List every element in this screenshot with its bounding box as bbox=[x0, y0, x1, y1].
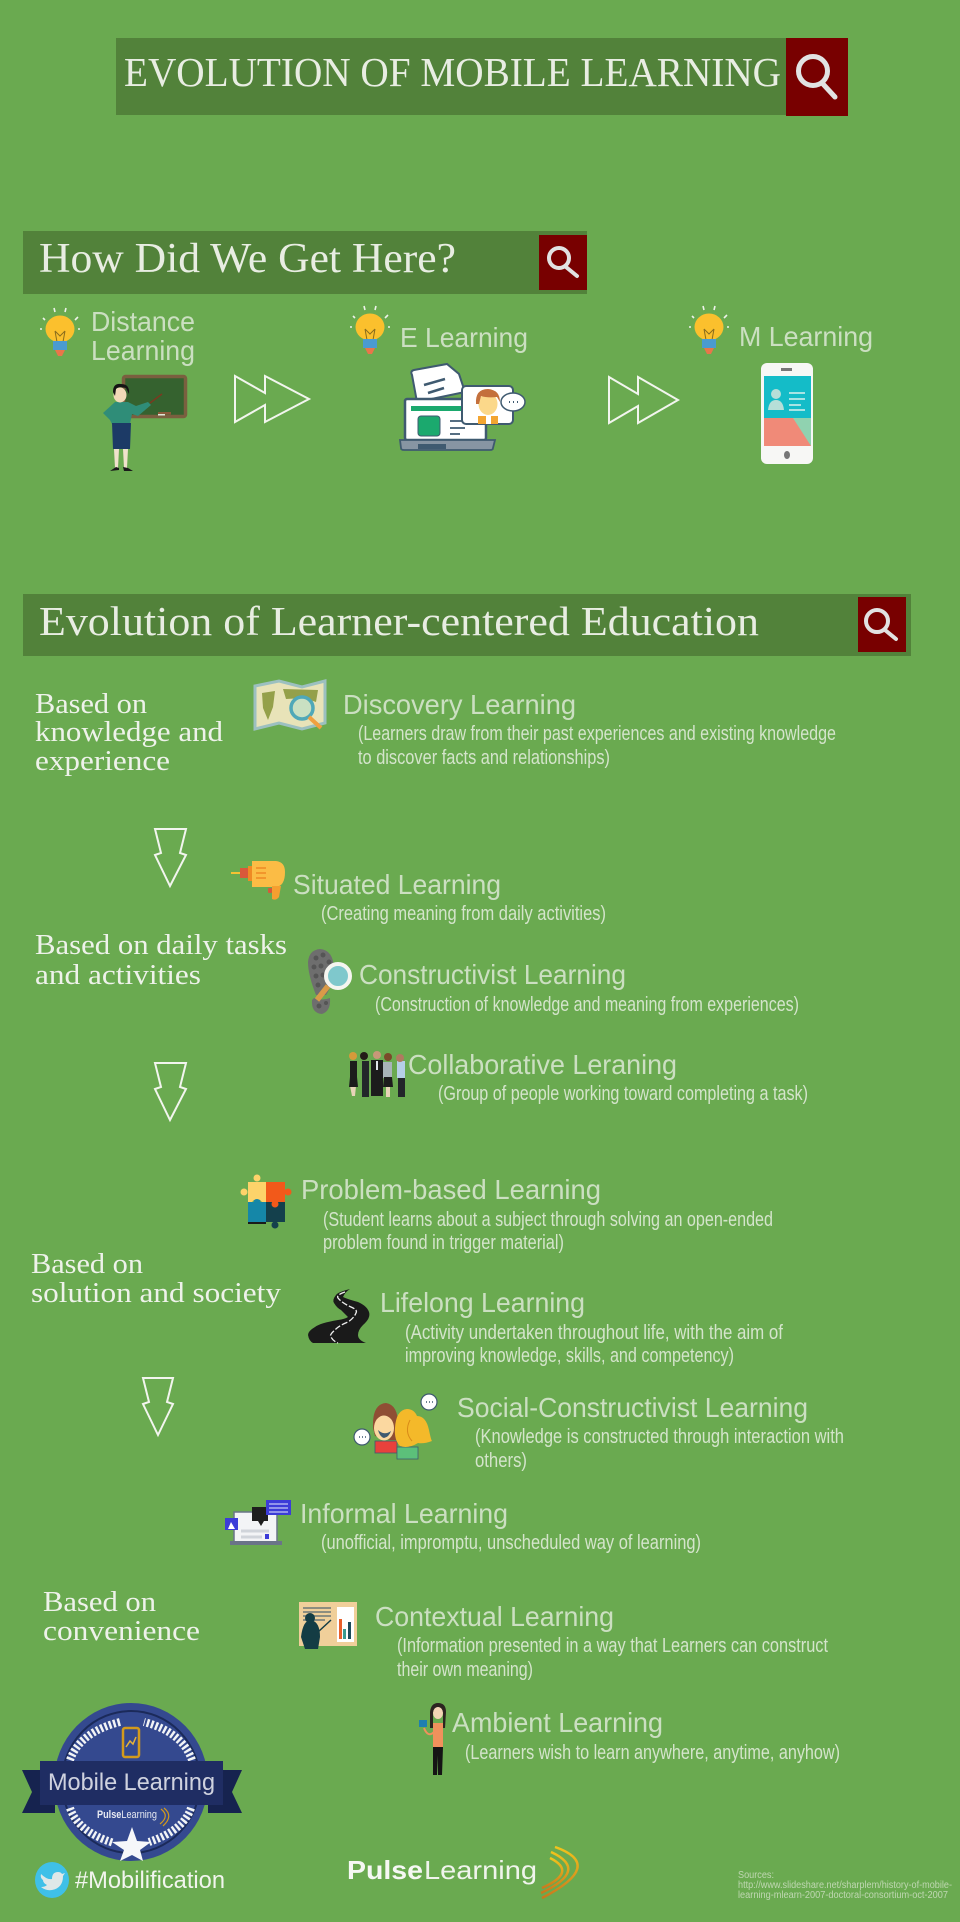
badge: mobile learning bbox=[22, 1703, 242, 1861]
step: e learning bbox=[350, 306, 528, 450]
category: based on convenience: convenience bbox=[43, 1616, 200, 1647]
arrow: down 1 bbox=[155, 829, 186, 886]
heading: Lifelong Learning bbox=[380, 1287, 585, 1318]
description bbox=[405, 1322, 783, 1367]
badge logo bbox=[97, 1808, 169, 1826]
icon: light bulb bbox=[40, 308, 80, 356]
panel: how did we get here heading bbox=[23, 231, 587, 294]
badge logo: PulseLearning bbox=[97, 1809, 157, 1821]
heading: Discovery Learning bbox=[343, 689, 576, 720]
sources: learning-mlearn-2007-doctoral-consortium-oct-2007 bbox=[738, 1890, 948, 1901]
item: constructivist learning bbox=[308, 949, 799, 1016]
item: problem-based learning bbox=[240, 1174, 773, 1254]
description: improving knowledge, skills, and competency) bbox=[405, 1345, 734, 1367]
description bbox=[397, 1635, 828, 1681]
icon: swirl bbox=[541, 1847, 578, 1898]
title: EVOLUTION OF MOBILE LEARNING bbox=[124, 49, 781, 95]
description: (Construction of knowledge and meaning from experiences) bbox=[375, 994, 799, 1016]
category: based on solution and society: solution and society bbox=[31, 1278, 281, 1309]
heading: Evolution of Learner-centered Education bbox=[39, 598, 759, 644]
label: E Learning bbox=[400, 322, 528, 353]
description: (Student learns about a subject through solving an open-ended bbox=[323, 1209, 773, 1231]
arrow: double chevron 1 bbox=[235, 376, 309, 422]
icon: star bbox=[112, 1827, 151, 1861]
category: based on knowledge and experience: Based on bbox=[35, 689, 147, 720]
heading: Informal Learning bbox=[300, 1498, 508, 1529]
sources: Sources: bbox=[738, 1870, 774, 1881]
icon: light bulb bbox=[350, 306, 390, 354]
category: based on solution and society bbox=[31, 1249, 281, 1309]
icon: presenter with chart bbox=[299, 1602, 357, 1649]
icon: puzzle bbox=[240, 1174, 292, 1228]
category: based on daily tasks and activities bbox=[35, 930, 287, 991]
category: based on daily tasks and activities: Based on daily tasks bbox=[35, 930, 287, 961]
description bbox=[323, 1209, 773, 1254]
heading: Situated Learning bbox=[293, 869, 501, 900]
description: (Group of people working toward completing a task) bbox=[438, 1083, 808, 1105]
icon: light bulb bbox=[689, 306, 729, 354]
logo: pulselearning: Learning bbox=[424, 1855, 537, 1885]
logo: pulselearning bbox=[347, 1847, 578, 1898]
heading: Collaborative Leraning bbox=[408, 1049, 677, 1080]
laurel wreath bbox=[70, 1722, 192, 1843]
description: (Creating meaning from daily activities) bbox=[321, 903, 606, 925]
category: based on convenience bbox=[43, 1587, 200, 1647]
icon: two women talking bbox=[354, 1394, 437, 1459]
icon: magnifier bbox=[539, 235, 587, 290]
item: contextual learning bbox=[299, 1601, 828, 1681]
description: (Activity undertaken throughout life, with the aim of bbox=[405, 1322, 783, 1344]
label: M Learning bbox=[739, 321, 873, 352]
logo: pulselearning: Pulse bbox=[347, 1855, 423, 1885]
heading: Constructivist Learning bbox=[359, 959, 626, 990]
item: discovery learning bbox=[255, 681, 836, 769]
item: situated learning bbox=[231, 861, 606, 925]
heading: Ambient Learning bbox=[452, 1707, 663, 1738]
icon: group of people bbox=[349, 1051, 405, 1097]
description: (Learners wish to learn anywhere, anytime, anyhow) bbox=[465, 1742, 840, 1764]
item: lifelong learning bbox=[308, 1287, 783, 1367]
description: others) bbox=[475, 1450, 527, 1472]
icon: laptop with chat bubbles bbox=[225, 1500, 291, 1545]
arrow: double chevron 2 bbox=[609, 377, 678, 423]
category: based on knowledge and experience: knowledge and bbox=[35, 717, 223, 748]
twitter hashtag bbox=[35, 1862, 225, 1898]
icon: laptop with tutor bbox=[400, 364, 525, 450]
description: (Learners draw from their past experiences and existing knowledge bbox=[358, 723, 836, 745]
label: Learning bbox=[91, 335, 195, 366]
icon: winding road bbox=[308, 1289, 369, 1343]
ribbon bbox=[40, 1761, 223, 1805]
icon: smartphone bbox=[761, 363, 813, 464]
ribbon tails bbox=[22, 1770, 242, 1813]
step: m learning bbox=[689, 306, 873, 464]
sources bbox=[738, 1870, 952, 1901]
category: based on solution and society: Based on bbox=[31, 1249, 143, 1280]
category: based on knowledge and experience bbox=[35, 689, 223, 777]
panel: evolution heading bbox=[23, 594, 911, 656]
icon: gold phone bbox=[123, 1728, 139, 1757]
description: (Information presented in a way that Learners can construct bbox=[397, 1635, 828, 1657]
category: based on convenience: Based on bbox=[43, 1587, 156, 1618]
hashtag text: #Mobilification bbox=[75, 1867, 225, 1894]
badge label: Mobile Learning bbox=[48, 1769, 215, 1796]
icon: magnifier bbox=[858, 597, 906, 652]
icon: map with magnifier bbox=[255, 681, 325, 729]
item: informal learning bbox=[225, 1498, 701, 1554]
icon: person with phone bbox=[419, 1703, 446, 1775]
item: ambient learning bbox=[419, 1703, 840, 1775]
heading: Contextual Learning bbox=[375, 1601, 614, 1632]
description: (unofficial, impromptu, unscheduled way of learning) bbox=[321, 1532, 701, 1554]
description: problem found in trigger material) bbox=[323, 1232, 564, 1254]
title banner bbox=[116, 38, 848, 116]
heading: Problem-based Learning bbox=[301, 1174, 601, 1205]
label: Distance bbox=[91, 306, 195, 337]
category: based on knowledge and experience: experience bbox=[35, 746, 170, 777]
step: distance learning bbox=[40, 306, 195, 471]
description: to discover facts and relationships) bbox=[358, 747, 610, 769]
arrow: down 3 bbox=[143, 1378, 173, 1435]
description bbox=[475, 1426, 844, 1472]
heading: How Did We Get Here? bbox=[39, 236, 456, 282]
description: (Knowledge is constructed through interaction with bbox=[475, 1426, 844, 1448]
heading: Social-Constructivist Learning bbox=[457, 1392, 808, 1423]
category: based on daily tasks and activities: and activities bbox=[35, 960, 201, 991]
description: their own meaning) bbox=[397, 1659, 533, 1681]
icon: drill bbox=[231, 861, 285, 900]
description bbox=[358, 723, 836, 769]
arrow: down 2 bbox=[155, 1063, 186, 1120]
icon: footprint with magnifier bbox=[308, 949, 350, 1014]
item: social-constructivist learning bbox=[354, 1392, 844, 1472]
icon: twitter bird bbox=[35, 1862, 69, 1898]
icon: magnifier bbox=[786, 38, 848, 116]
label bbox=[91, 306, 195, 366]
icon: teacher at chalkboard bbox=[103, 376, 186, 471]
item: collaborative learning bbox=[349, 1049, 808, 1105]
